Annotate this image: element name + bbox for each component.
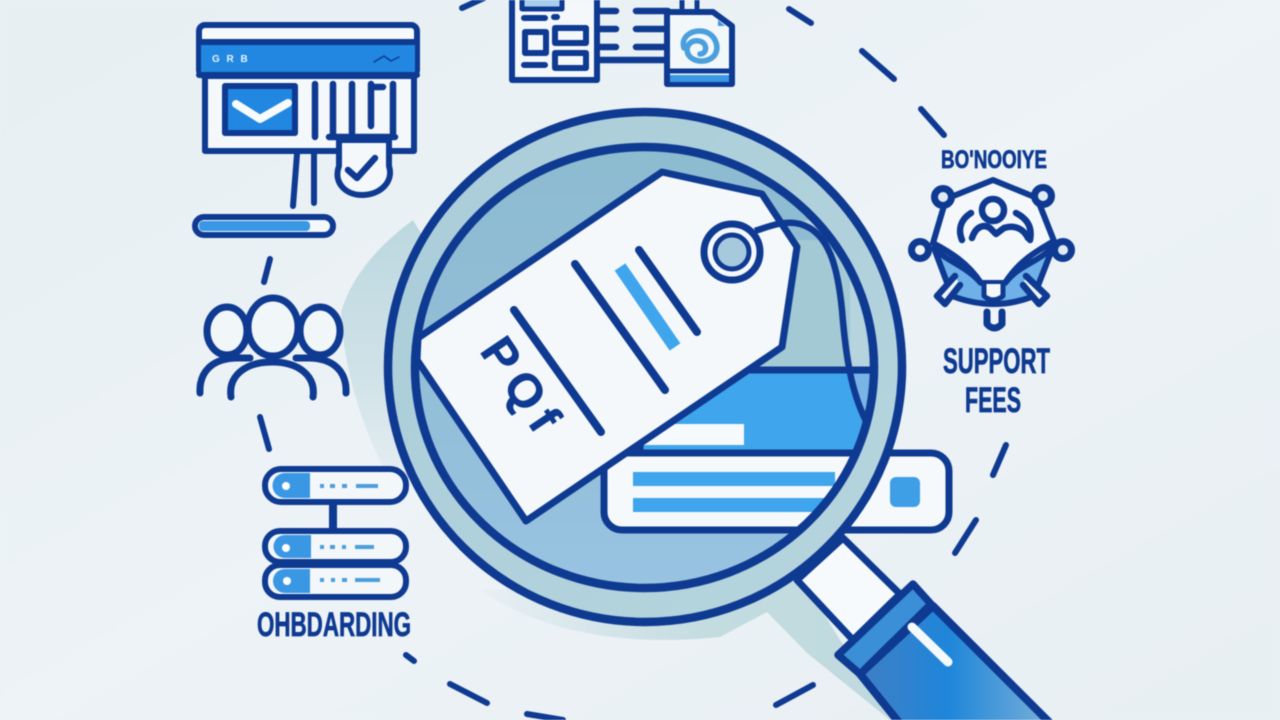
search bar card behind lens — [604, 453, 949, 530]
heading: curved label above helm: BO'NOOIYE — [941, 146, 1047, 174]
tag hole — [704, 224, 760, 280]
label: support fees: SUPPORT — [943, 342, 1050, 381]
ring outlines — [388, 112, 902, 622]
label: support fees: FEES — [965, 381, 1021, 420]
dashed orbit ring — [260, 0, 1006, 720]
blue browser panel — [640, 370, 890, 454]
price tag — [417, 172, 868, 521]
label: support fees — [943, 342, 1050, 420]
header label: G R B — [212, 54, 250, 65]
icon: support helm — [912, 180, 1072, 328]
magnifying glass handle — [797, 538, 1057, 720]
search bar content — [600, 448, 854, 534]
magnifier ring — [388, 112, 902, 622]
icon: document and file — [512, 0, 732, 84]
icon: shield check — [337, 140, 390, 195]
icon: onboarding server stack — [265, 469, 406, 597]
label: onboarding: OHBDARDING — [257, 606, 411, 644]
icon: team of people — [200, 298, 346, 397]
magnifying glass shadow — [341, 220, 900, 720]
tag text: PQf — [471, 327, 576, 448]
pale area beyond the tag string — [803, 220, 870, 367]
magnifier lens — [388, 112, 949, 622]
icon: browser window with checkmark — [195, 25, 417, 235]
